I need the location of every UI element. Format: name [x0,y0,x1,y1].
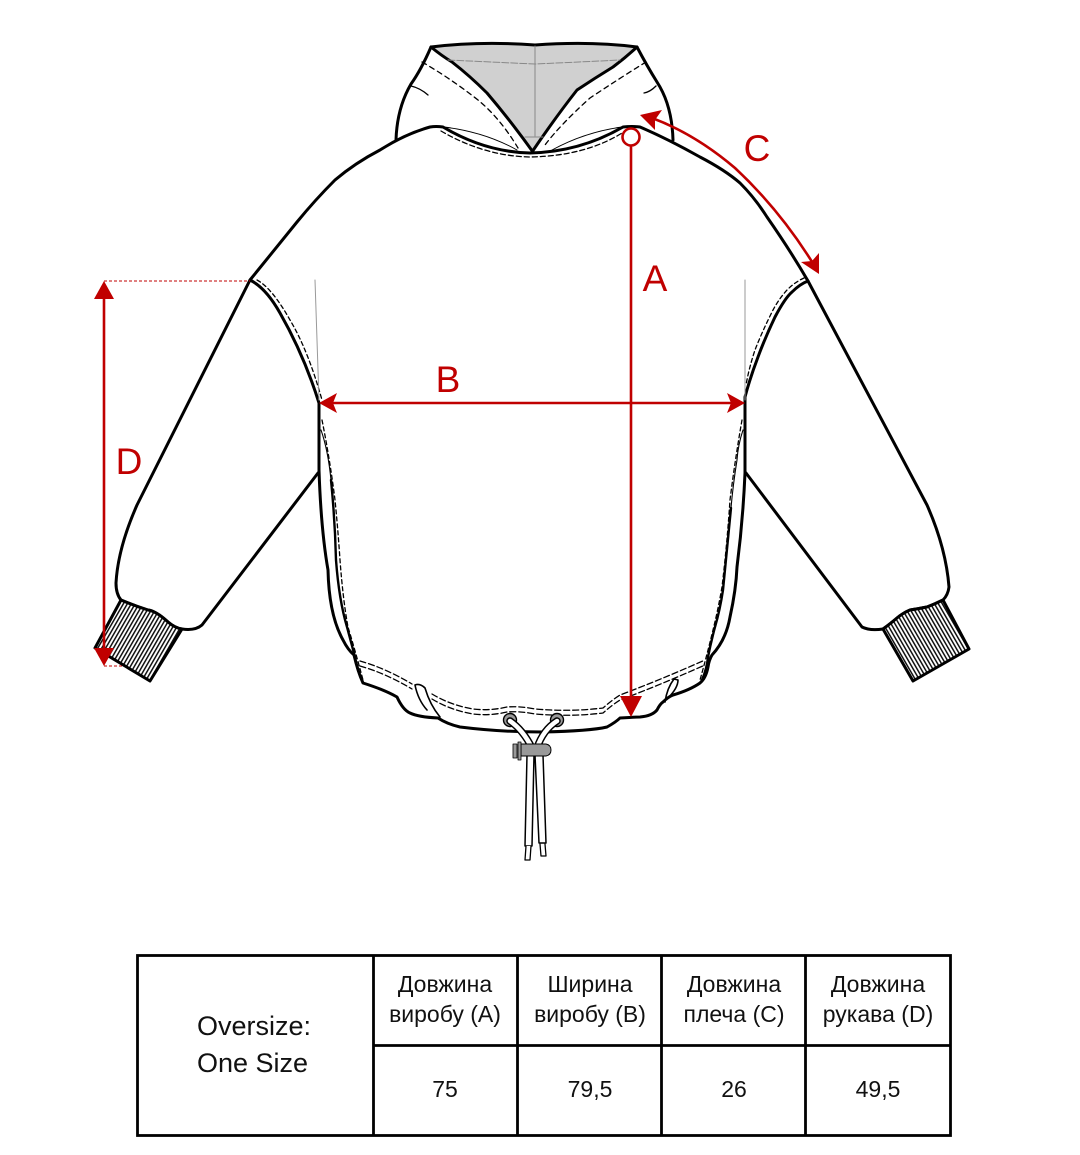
measurement A: length arrow: A [643,258,668,299]
size label: Oversize: [197,1011,311,1041]
column headers: виробу (B) [534,1001,646,1027]
measurement C: shoulder arrow [640,110,819,274]
size label [197,1011,311,1078]
right cuff [883,600,969,681]
table grid [138,955,950,1136]
hood [396,43,673,152]
column headers: Ширина [547,971,633,997]
left cuff [95,600,182,681]
size label: One Size [197,1048,308,1078]
drawstring with toggle [504,714,564,860]
values: 79,5 [568,1076,612,1102]
hoodie technical drawing [95,43,969,860]
neckline stitching [441,131,622,157]
values [432,1076,900,1102]
column headers: Довжина [831,971,925,997]
column headers: рукава (D) [823,1001,933,1027]
column headers: Довжина [687,971,781,997]
values: 75 [432,1076,458,1102]
measurement D: sleeve arrow [94,281,250,666]
values: 26 [721,1076,747,1102]
column headers [389,971,933,1027]
column headers: Довжина [398,971,492,997]
measurement C: shoulder arrow: C [744,128,770,169]
neckline creases [444,127,622,150]
measurement B: width arrow [319,359,745,413]
values: 49,5 [856,1076,900,1102]
measurement B: width arrow: B [436,359,460,400]
body outline [116,126,949,732]
size table [138,955,950,1136]
measurement A: length arrow [620,128,668,717]
measurement D: sleeve arrow: D [116,441,142,482]
hem stitching [360,660,705,715]
column headers: виробу (A) [389,1001,501,1027]
column headers: плеча (C) [684,1001,784,1027]
hem pleats [415,679,678,717]
